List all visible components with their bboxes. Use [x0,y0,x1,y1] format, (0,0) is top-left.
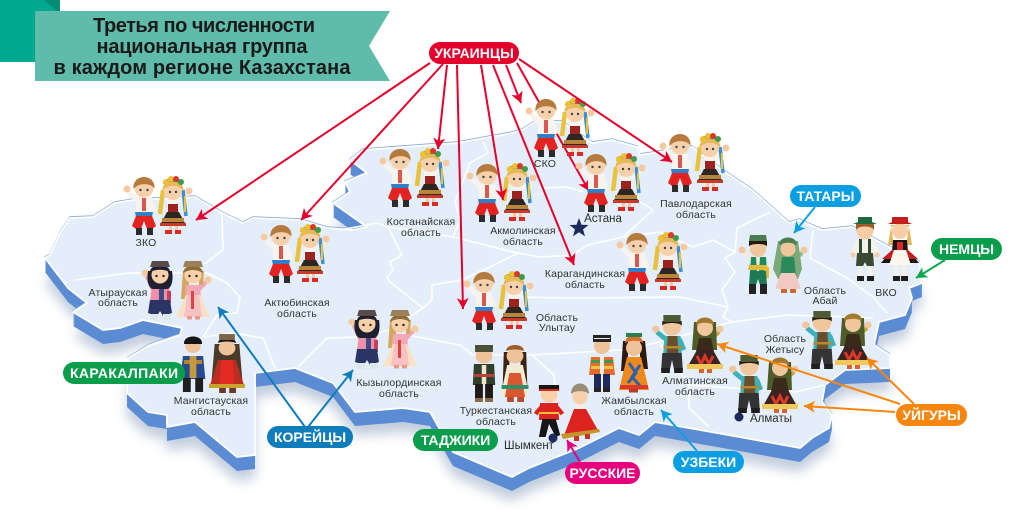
icon: city dot Almaty [734,412,744,422]
label: Karakalpaks [63,362,185,384]
label: Karakalpaks: КАРАКАЛПАКИ [70,365,178,381]
region labels: область [614,406,654,418]
region labels: область [676,209,716,221]
region labels: область [675,386,715,398]
figures: Ukrainians Aktobe [260,224,330,283]
figures: Uyghurs Zhetysu [802,311,872,369]
label: Tajiks [413,429,498,451]
region labels: Алматинская [662,375,728,387]
icon: capital star Astana [570,218,588,236]
corner block [0,0,60,62]
region labels: Костанайская [387,216,455,228]
arrows: Ukrainians [196,59,672,309]
icon: city dot Shymkent [548,434,558,442]
region labels: Улытау [539,322,576,334]
region labels: Абай [812,295,838,307]
region labels: область [98,297,138,309]
region labels: Жамбылская [601,395,667,407]
arrow: Germans [916,260,945,278]
arrows: Uyghurs [717,344,914,412]
title banner [35,11,390,81]
label: Russians [565,462,640,484]
figures: Koreans Atyrau [142,261,212,320]
label: Tatars: ТАТАРЫ [797,188,854,204]
region labels: Актюбинская [264,297,330,309]
figures: Uyghurs Almaty region [652,315,724,373]
title banner: национальная группа [96,36,308,58]
region borders [75,142,887,427]
region labels: Акмолинская [490,225,556,237]
figures: Uyghurs Almaty city [729,355,798,413]
figures: Ukrainians SKO [526,98,594,157]
title banner: Третья по численности [93,15,315,37]
region labels: Алматы [750,413,792,425]
figures: Uzbeks Zhambyl [589,333,649,392]
region labels: область [277,308,317,320]
figures: Germans VKO [850,217,919,281]
figures: Koreans Kyzylorda [348,310,418,369]
region labels: ВКО [875,287,897,299]
arrow: Uzbeks [661,410,697,451]
region labels: Павлодарская [660,198,732,210]
region labels: СКО [534,158,556,170]
figures: Ukrainians Astana [576,153,646,212]
label: Ukrainians [429,42,519,64]
label: Ukrainians: УКРАИНЦЫ [434,45,514,61]
label: Uzbeks [673,451,744,473]
figures: Ukrainians Akmola [466,163,536,222]
map of Kazakhstan [45,121,922,501]
title banner: в каждом регионе Казахстана [54,57,351,79]
region labels: область [379,388,419,400]
region labels: область [565,279,605,291]
figures: Ukrainians Kostanay [380,148,450,207]
label: Russians: РУССКИЕ [569,465,636,481]
figures: Ukrainians ZKO [124,176,192,235]
region labels: Мангистауская [174,395,248,407]
region labels: Атырауская [89,287,147,299]
arrows: Koreans [218,307,353,427]
region labels: область [476,416,516,428]
label: Tajiks: ТАДЖИКИ [421,432,490,448]
region labels: Область [804,285,847,297]
label: Germans: НЕМЦЫ [939,241,994,257]
region labels: Кызылординская [356,377,442,389]
figures: Tajiks Turkestan [473,345,530,402]
figures: Russians Shymkent [536,384,600,441]
region labels: область [191,406,231,418]
region labels: Жетысу [766,344,805,356]
arrow: Tatars [794,207,815,233]
label: Tatars [790,185,861,207]
figures: Karakalpaks Mangystau [181,334,245,393]
label: Koreans [267,426,353,448]
arrow: Ukrainians to Astana passes behind figures [517,63,589,191]
region labels: Туркестанская [460,405,532,417]
region labels: Шымкент [504,440,555,452]
region labels: область [401,227,441,239]
label: Germans [931,238,1002,260]
arrow: Russians [567,440,580,462]
label: Uzbeks: УЗБЕКИ [681,454,736,470]
region labels: ЗКО [136,237,156,249]
figures: Ukrainians Karaganda [616,232,688,291]
region labels: Область [764,333,807,345]
region labels: Астана [584,213,622,225]
figures: Ukrainians Ulytau [464,271,534,330]
label: Uyghurs: УЙГУРЫ [902,406,961,423]
label: Uyghurs [896,404,967,426]
figures: Ukrainians Pavlodar [660,133,730,192]
region labels: область [503,236,543,248]
region labels [89,158,897,452]
region labels: Карагандинская [545,268,625,280]
label: Koreans: КОРЕЙЦЫ [274,428,346,445]
figures: Tatars Abay [738,235,808,294]
region labels: Область [536,312,579,324]
